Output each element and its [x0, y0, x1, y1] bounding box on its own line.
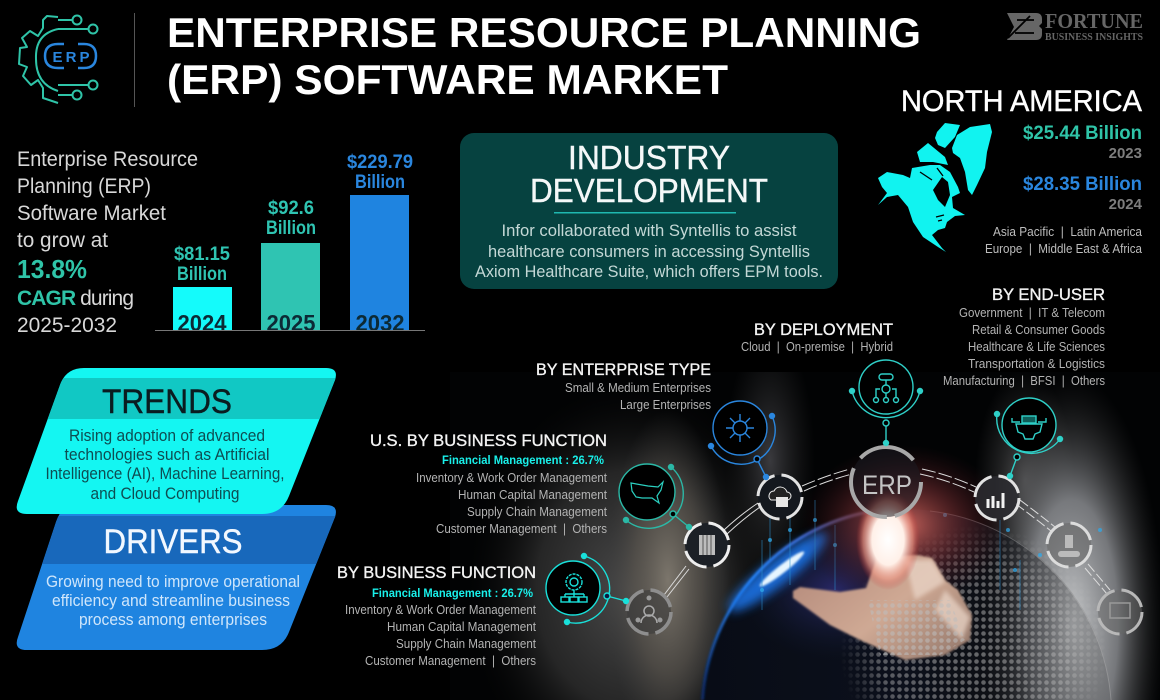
- list: by end-user: Government | IT & Telecom: [959, 305, 1105, 320]
- list: by end-user: Manufacturing | BFSI | Others: [943, 373, 1105, 388]
- panel: industry development: Infor collaborated with Syntellis to assist: [502, 221, 797, 240]
- panel: north america: Asia Pacific | Latin America: [993, 224, 1143, 239]
- panel: trends: [17, 368, 336, 514]
- list: by business function: Inventory & Work Order Management: [345, 602, 536, 617]
- list: U.S. by business function: Supply Chain Management: [467, 504, 607, 519]
- node: chart: [975, 476, 1019, 520]
- title: (ERP) SOFTWARE MARKET: [167, 56, 728, 103]
- bar chart: [155, 152, 425, 336]
- panel: drivers: DRIVERS: [104, 523, 242, 561]
- text: market summary: Enterprise Resource: [17, 148, 198, 171]
- panel: north america: [901, 85, 1143, 256]
- panel: north america: 2023: [1109, 145, 1142, 162]
- panel: trends: TRENDS: [102, 383, 232, 421]
- list: by end-user: [943, 285, 1105, 388]
- panel: drivers: process among enterprises: [79, 611, 267, 629]
- panel: trends: and Cloud Computing: [90, 485, 240, 503]
- list: U.S. by business function: Financial Management : 26.7%: [442, 453, 604, 467]
- panel: north america: NORTH AMERICA: [901, 85, 1142, 118]
- list: by end-user: Retail & Consumer Goods: [972, 322, 1105, 337]
- list: by business function: Supply Chain Management: [396, 636, 536, 651]
- icon: by business function: [546, 554, 628, 624]
- list: U.S. by business function: U.S. BY BUSINESS FUNCTION: [370, 431, 607, 450]
- title: ENTERPRISE RESOURCE PLANNING: [167, 9, 921, 56]
- list: by business function: Financial Management : 26.7%: [372, 586, 533, 600]
- list: U.S. by business function: Customer Management | Others: [436, 521, 607, 536]
- list: U.S. by business function: [370, 431, 607, 536]
- bar chart: $92.6: [268, 198, 314, 219]
- bar chart: $81.15: [174, 244, 230, 265]
- text: market summary: 2025-2032: [17, 314, 117, 337]
- panel: north america: $28.35 Billion: [1023, 174, 1142, 195]
- list: by enterprise type: Large Enterprises: [620, 397, 711, 412]
- map: north america: [878, 123, 992, 252]
- panel: industry development: DEVELOPMENT: [530, 172, 768, 209]
- bar chart: 2024: [178, 310, 227, 336]
- bar chart: 2025: [266, 310, 316, 336]
- photo: hand touching globe: [450, 372, 1160, 700]
- icon: by enterprise type: [708, 401, 775, 480]
- divider: [134, 13, 135, 107]
- panel: drivers: [17, 505, 336, 650]
- icon: by deployment: [850, 360, 922, 446]
- text: market summary: CAGR during: [17, 287, 134, 310]
- list: by deployment: [741, 320, 893, 354]
- text: market summary: Planning (ERP): [17, 175, 151, 198]
- bar chart: $229.79: [347, 152, 413, 173]
- logo: ERP gear: ERP: [52, 49, 90, 66]
- node: ERP hub: ERP: [862, 470, 912, 500]
- list: by business function: [337, 563, 536, 668]
- icon: U.S. by business function: [619, 464, 692, 530]
- panel: trends: technologies such as Artificial: [64, 446, 270, 464]
- node: building: [685, 523, 729, 567]
- list: by end-user: BY END-USER: [992, 285, 1105, 304]
- text: market summary: Software Market: [17, 202, 166, 225]
- list: by enterprise type: BY ENTERPRISE TYPE: [536, 360, 711, 379]
- panel: north america: $25.44 Billion: [1023, 123, 1142, 144]
- list: by deployment: Cloud | On-premise | Hybrid: [741, 339, 893, 354]
- dashed connector lines: [664, 469, 1110, 597]
- list: by enterprise type: Small & Medium Enterprises: [565, 380, 711, 395]
- list: U.S. by business function: Inventory & Work Order Management: [416, 470, 607, 485]
- panel: industry development: [460, 133, 838, 289]
- logo: Fortune Business Insights: [1007, 9, 1143, 43]
- list: by end-user: Transportation & Logistics: [968, 356, 1105, 371]
- panel: industry development: INDUSTRY: [568, 139, 730, 176]
- icon: by end-user: [994, 398, 1062, 478]
- text: market summary: 13.8%: [17, 254, 87, 284]
- panel: industry development: healthcare consumers in accessing Syntellis: [488, 242, 810, 261]
- list: by enterprise type: [536, 360, 711, 412]
- logo: Fortune Business Insights: FORTUNE: [1045, 9, 1143, 33]
- text: market summary: [17, 148, 198, 337]
- list: by business function: Human Capital Management: [387, 619, 536, 634]
- panel: north america: 2024: [1109, 196, 1143, 213]
- panel: north america: Europe | Middle East & Africa: [985, 241, 1143, 256]
- list: by business function: Customer Management | Others: [365, 653, 536, 668]
- panel: industry development: Axiom Healthcare Suite, which offers EPM tools.: [475, 262, 823, 281]
- bar chart: Billion: [266, 218, 316, 239]
- panel: trends: Rising adoption of advanced: [69, 427, 265, 445]
- node: ERP hub: [851, 447, 921, 517]
- list: by end-user: Healthcare & Life Sciences: [968, 339, 1105, 354]
- logo: Fortune Business Insights: BUSINESS INSIGHTS: [1045, 32, 1143, 43]
- bar chart: 2032: [356, 310, 404, 336]
- bar chart: Billion: [355, 172, 405, 193]
- node: cloud: [758, 475, 802, 519]
- text: market summary: to grow at: [17, 229, 108, 252]
- panel: drivers: efficiency and streamline business: [52, 592, 290, 610]
- node: robot: [1047, 523, 1091, 567]
- list: by business function: BY BUSINESS FUNCTION: [337, 563, 536, 582]
- list: U.S. by business function: Human Capital Management: [458, 487, 607, 502]
- logo: ERP gear: [19, 16, 98, 103]
- title: [167, 9, 921, 103]
- list: by deployment: BY DEPLOYMENT: [754, 320, 893, 339]
- panel: trends: Intelligence (AI), Machine Learning,: [46, 465, 284, 483]
- node: people: [627, 590, 671, 634]
- node: cart: [1098, 590, 1142, 634]
- bar chart: Billion: [177, 264, 227, 285]
- panel: drivers: Growing need to improve operational: [46, 573, 300, 591]
